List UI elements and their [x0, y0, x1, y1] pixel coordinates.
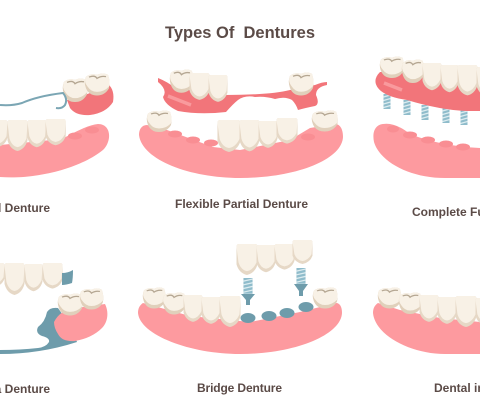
- label: Flexible Partial Denture: [175, 197, 308, 211]
- left implant arrow: [241, 278, 255, 305]
- clasp wire: [0, 93, 66, 108]
- lower molars: [58, 288, 103, 316]
- upper teeth: [0, 263, 62, 295]
- upper gum highlight: [384, 83, 402, 90]
- lower gum: [54, 304, 107, 341]
- lower teeth: [0, 119, 66, 151]
- panel: dental implants (bottom right): [373, 287, 480, 395]
- gum sockets: [168, 130, 315, 146]
- flexible upper plate: [158, 78, 327, 113]
- upper teeth: [170, 69, 314, 102]
- lower gum: [139, 124, 343, 178]
- plate highlight: [168, 96, 191, 105]
- panel: bridge denture (bottom middle): [138, 240, 342, 395]
- panel: partial denture (top left): [0, 73, 113, 215]
- upper molars: [63, 73, 110, 102]
- right implant arrow: [294, 268, 308, 296]
- panel: flexible partial denture (top middle): [139, 69, 343, 211]
- lower teeth: [147, 110, 338, 152]
- upper partial gum: [67, 84, 113, 115]
- gum sockets: [68, 126, 99, 140]
- bridge teeth: [236, 240, 312, 275]
- lower teeth: [143, 287, 338, 327]
- lower teeth: [378, 287, 480, 327]
- lower gum: [0, 124, 109, 177]
- title: Types Of Dentures: [165, 23, 315, 42]
- upper gum: [375, 70, 480, 111]
- lower gum: [373, 303, 480, 354]
- lower gum: [373, 124, 480, 178]
- metal frame: [0, 308, 77, 354]
- implant screws: [384, 94, 468, 125]
- upper teeth: [380, 56, 480, 96]
- abutments: [240, 302, 314, 323]
- clasp: [62, 270, 73, 285]
- gum sockets: [387, 126, 470, 150]
- label: Bridge Denture: [197, 381, 282, 395]
- lower gum: [138, 303, 342, 354]
- panel: complete full denture (top right): [373, 56, 480, 219]
- panel: metal denture (bottom left): [0, 263, 107, 396]
